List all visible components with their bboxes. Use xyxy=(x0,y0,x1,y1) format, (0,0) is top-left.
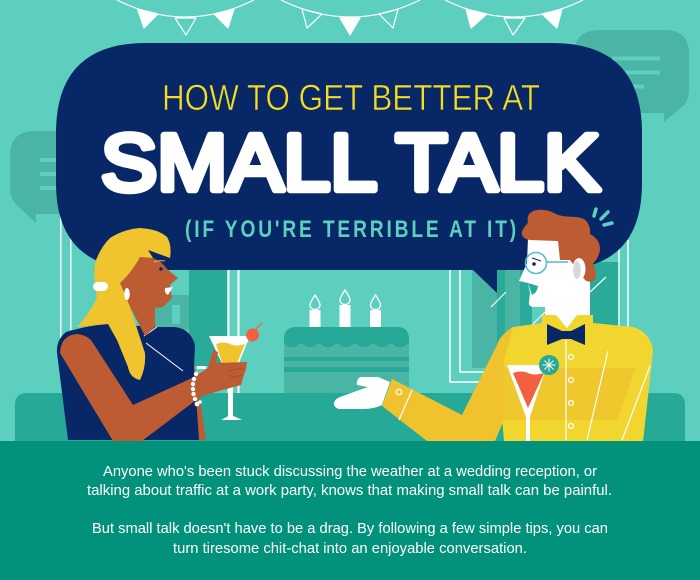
sleeve xyxy=(382,327,513,441)
red hair xyxy=(522,210,600,282)
bow tie xyxy=(547,324,585,345)
title speech bubble xyxy=(56,43,642,293)
background speech bubble: left xyxy=(10,131,80,223)
intro text xyxy=(87,464,612,557)
her eye and brow xyxy=(159,267,163,271)
blonde hair xyxy=(77,228,171,380)
intro text: turn tiresome chit-chat into an enjoyable conversation. xyxy=(173,541,527,557)
left window xyxy=(60,215,240,395)
her mouth xyxy=(165,287,173,295)
cake xyxy=(284,327,409,393)
man xyxy=(334,209,653,441)
intro text: But small talk doesn't have to be a drag. By following a few simple tips, you can xyxy=(92,521,608,537)
heading: small talk: SMALL TALK xyxy=(101,118,600,207)
intro panel xyxy=(0,441,700,580)
navy dress xyxy=(57,324,199,440)
woman xyxy=(57,228,262,441)
heading: how to get better at: HOW TO GET BETTER AT xyxy=(162,77,540,118)
his martini glass xyxy=(507,365,547,441)
intro text: Anyone who's been stuck discussing the weather at a wedding reception, or xyxy=(103,464,597,480)
lapel pin xyxy=(539,355,559,375)
his hand xyxy=(334,377,390,409)
bunting garlands xyxy=(117,0,583,35)
necklace xyxy=(144,327,183,371)
shirt fold lines xyxy=(399,340,650,440)
yellow shirt xyxy=(497,315,653,441)
earring xyxy=(124,288,130,300)
pearl bracelet xyxy=(191,372,202,406)
her arm and hand xyxy=(60,334,247,441)
background speech bubble: right xyxy=(574,30,689,122)
her martini glass xyxy=(209,323,262,420)
her far arm xyxy=(194,360,206,440)
subheading: (IF YOU'RE TERRIBLE AT IT) xyxy=(185,215,516,243)
candles xyxy=(310,290,381,327)
his ear xyxy=(572,258,586,280)
glasses xyxy=(547,261,568,263)
his mouth xyxy=(528,283,538,295)
his neck and face xyxy=(519,238,590,316)
his eye and brow xyxy=(532,262,536,266)
right window xyxy=(450,240,628,382)
her face and neck xyxy=(120,255,178,336)
shirt buttons xyxy=(396,354,574,428)
shirt shadow xyxy=(504,368,640,420)
intro text: talking about traffic at a work party, knows that making small talk can be painful. xyxy=(87,483,612,499)
hair tie xyxy=(93,282,108,291)
collar gap xyxy=(556,315,577,328)
sweat marks xyxy=(594,209,612,225)
couch xyxy=(15,393,685,441)
